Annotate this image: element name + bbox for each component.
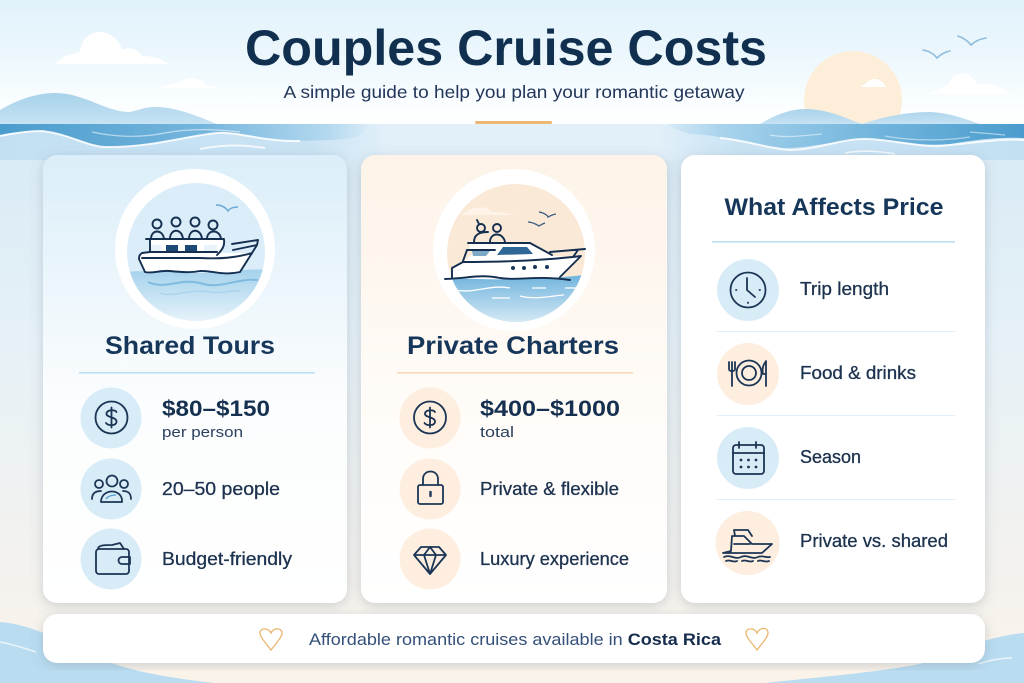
heading: Private Charters bbox=[407, 332, 619, 360]
sun bbox=[804, 51, 902, 149]
heading: Shared Tours bbox=[105, 332, 275, 360]
row: food bbox=[717, 343, 916, 405]
row: private vs shared: Private vs. shared bbox=[800, 531, 948, 551]
divider bbox=[79, 372, 315, 374]
row: budget bbox=[80, 528, 292, 590]
mountains left bbox=[0, 93, 217, 124]
row: private vs shared bbox=[716, 511, 948, 575]
bottom waves bbox=[0, 622, 1024, 683]
row: price: $400–$1000 bbox=[480, 396, 620, 421]
row: price: per person bbox=[162, 424, 243, 441]
divider bbox=[712, 241, 955, 243]
mountains right bbox=[760, 109, 980, 124]
footer banner bbox=[43, 614, 985, 663]
footer text: Affordable romantic cruises available in Costa Rica bbox=[309, 631, 722, 649]
birds bbox=[923, 36, 986, 58]
illustration: private yacht bbox=[433, 169, 595, 331]
sea band bbox=[0, 124, 1024, 160]
divider bbox=[397, 372, 633, 374]
row: food: Food & drinks bbox=[800, 363, 916, 383]
title: Couples Cruise Costs bbox=[245, 20, 767, 76]
illustration: shared tour boat bbox=[115, 169, 275, 330]
row: budget: Budget-friendly bbox=[162, 549, 292, 569]
icon: heart left bbox=[260, 629, 282, 650]
boat bbox=[139, 218, 258, 273]
panel: private charters bbox=[361, 155, 667, 603]
accent divider bbox=[475, 121, 552, 124]
panel: shared tours bbox=[43, 155, 347, 603]
row: trip length: Trip length bbox=[800, 279, 889, 299]
row: people: 20–50 people bbox=[162, 479, 280, 499]
heading: What Affects Price bbox=[724, 194, 944, 221]
cloud right bbox=[930, 73, 1010, 94]
row: lock: Private & flexible bbox=[480, 479, 619, 499]
row: diamond: Luxury experience bbox=[480, 549, 629, 569]
row: price bbox=[400, 388, 620, 448]
row: lock bbox=[400, 458, 619, 520]
row: price: $80–$150 bbox=[162, 396, 270, 421]
row: season bbox=[717, 427, 861, 489]
row: season: Season bbox=[800, 447, 861, 467]
row: price: total bbox=[480, 424, 514, 441]
cloud left bbox=[55, 32, 168, 64]
cloud small bbox=[160, 78, 218, 88]
row: trip length bbox=[717, 259, 889, 321]
row: price bbox=[80, 388, 270, 448]
subtitle: A simple guide to help you plan your romantic getaway bbox=[284, 82, 745, 102]
row: people bbox=[80, 458, 280, 520]
panel: what affects price bbox=[681, 155, 985, 603]
row: diamond bbox=[400, 528, 629, 590]
icon: heart right bbox=[746, 628, 768, 650]
cloud on sun bbox=[860, 79, 886, 87]
